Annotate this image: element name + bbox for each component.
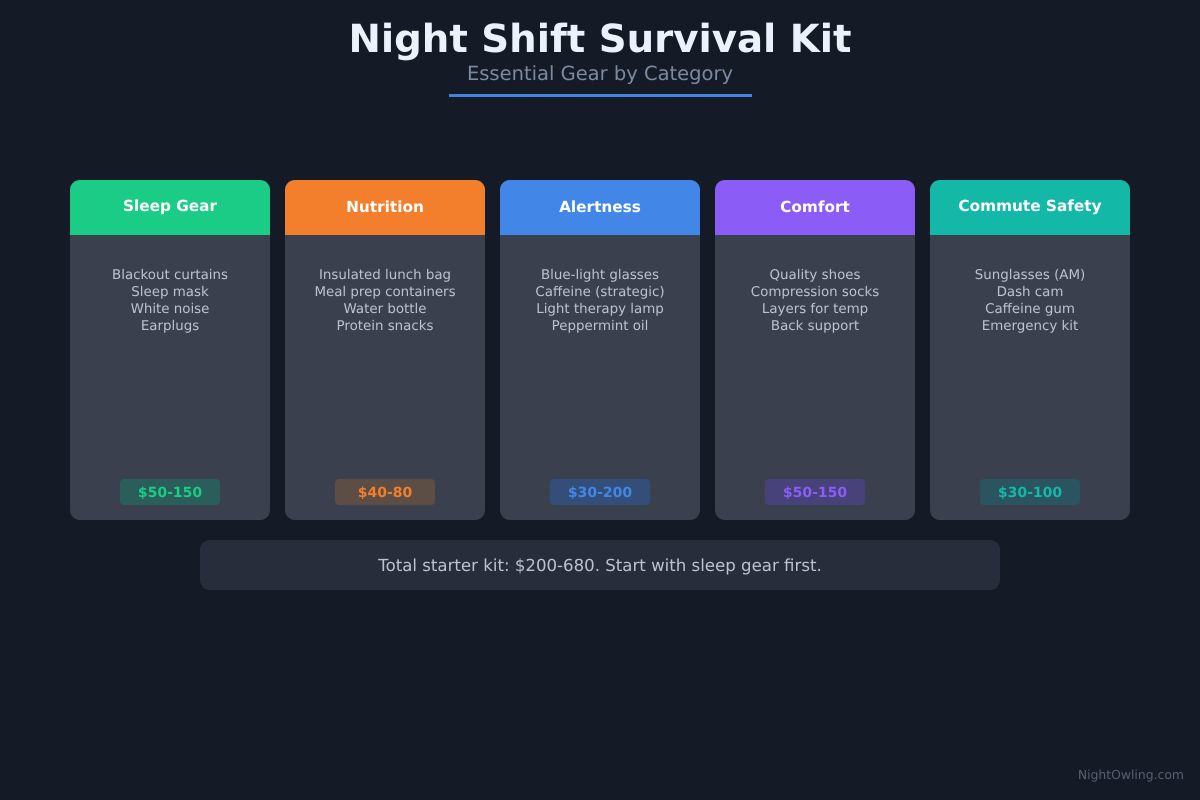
price: nutrition [335, 479, 435, 505]
price: nutrition: $40-80 [358, 485, 413, 501]
list: commute safety items: Caffeine gum [985, 302, 1075, 317]
list: comfort items [751, 268, 879, 334]
price: sleep gear: $50-150 [138, 485, 202, 501]
list: comfort items: Back support [771, 319, 859, 334]
header: comfort [715, 180, 915, 235]
list: alertness items: Peppermint oil [552, 319, 648, 334]
callout: total cost [200, 540, 1000, 590]
title underline [449, 94, 752, 97]
list: commute safety items [975, 268, 1085, 334]
header: commute safety [930, 180, 1130, 235]
list: commute safety items: Sunglasses (AM) [975, 268, 1085, 283]
list: comfort items: Layers for temp [762, 302, 868, 317]
price: sleep gear [120, 479, 220, 505]
price: comfort [765, 479, 865, 505]
list: alertness items: Light therapy lamp [536, 302, 664, 317]
list: sleep gear items: White noise [131, 302, 209, 317]
list: nutrition items: Insulated lunch bag [319, 268, 451, 283]
list: nutrition items: Protein snacks [337, 319, 433, 334]
list: alertness items: Blue-light glasses [541, 268, 659, 283]
callout: total cost: Total starter kit: $200-680. Start with sleep gear first. [377, 556, 822, 575]
list: alertness items [535, 268, 665, 334]
list: nutrition items [314, 268, 456, 334]
price: commute safety [980, 479, 1080, 505]
heading: nutrition: Nutrition [346, 198, 424, 216]
subtitle: Essential Gear by Category [467, 62, 733, 85]
panel: sleep gear [70, 180, 270, 520]
list: comfort items: Quality shoes [770, 268, 861, 283]
price: alertness: $30-200 [568, 485, 632, 501]
price: comfort: $50-150 [783, 485, 847, 501]
heading: commute safety: Commute Safety [958, 197, 1102, 215]
footer credit: NightOwling.com [1078, 767, 1184, 782]
panel: nutrition [285, 180, 485, 520]
list: sleep gear items [112, 268, 228, 334]
title: Night Shift Survival Kit [348, 17, 852, 62]
list: sleep gear items: Blackout curtains [112, 268, 228, 283]
heading: alertness: Alertness [559, 198, 641, 216]
panel: commute safety [930, 180, 1130, 520]
header: alertness [500, 180, 700, 235]
list: sleep gear items: Sleep mask [131, 285, 209, 300]
heading: comfort: Comfort [780, 198, 850, 216]
list: sleep gear items: Earplugs [141, 319, 199, 334]
panel: comfort [715, 180, 915, 520]
price: alertness [550, 479, 650, 505]
list: comfort items: Compression socks [751, 285, 879, 300]
header: sleep gear [70, 180, 270, 235]
list: commute safety items: Dash cam [997, 285, 1063, 300]
list: commute safety items: Emergency kit [982, 319, 1078, 334]
list: nutrition items: Water bottle [344, 302, 426, 317]
header: nutrition [285, 180, 485, 235]
list: nutrition items: Meal prep containers [314, 285, 456, 300]
heading: sleep gear: Sleep Gear [123, 197, 217, 215]
panel: alertness [500, 180, 700, 520]
list: alertness items: Caffeine (strategic) [535, 285, 665, 300]
price: commute safety: $30-100 [998, 485, 1062, 501]
